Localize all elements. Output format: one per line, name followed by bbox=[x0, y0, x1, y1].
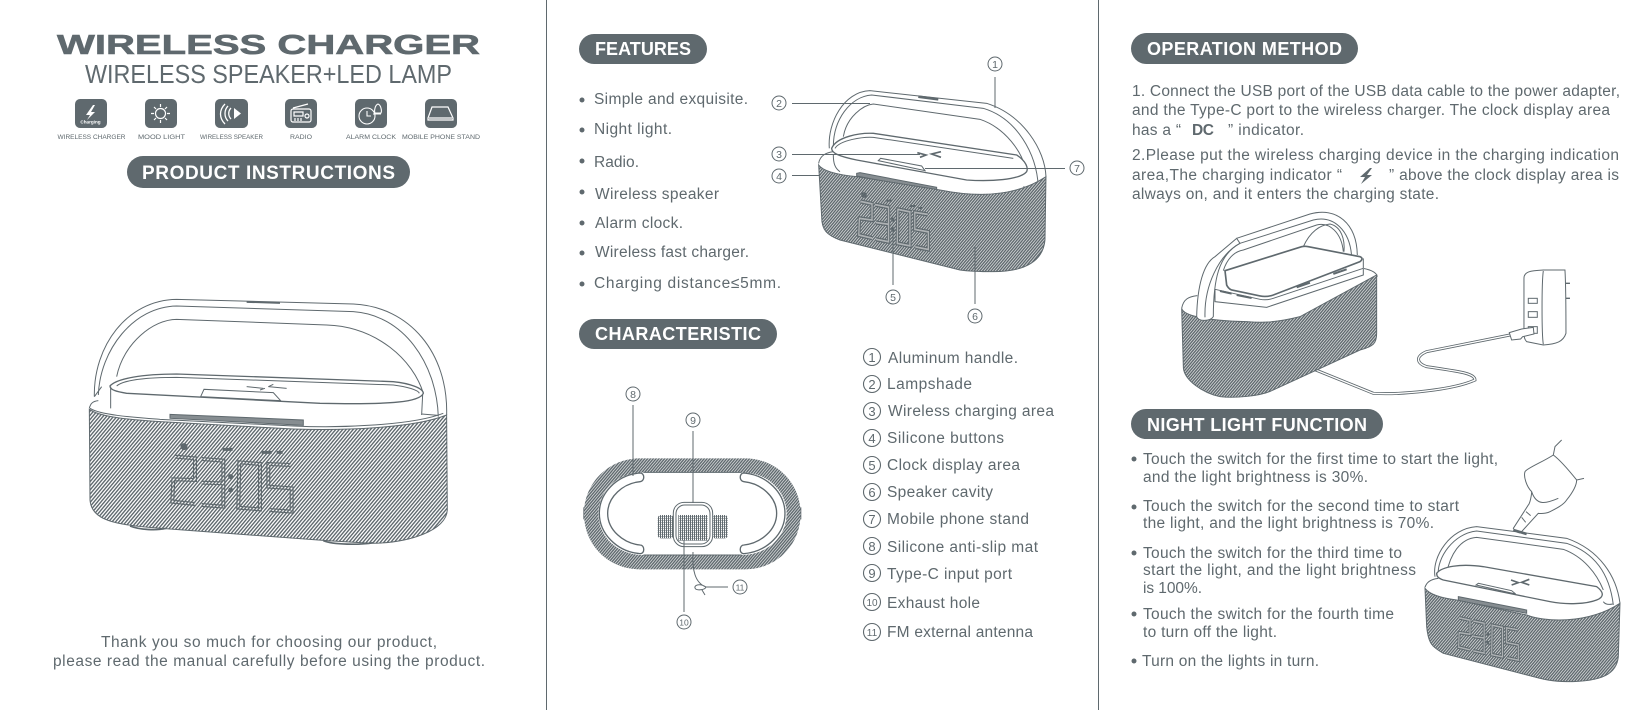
list: features: Radio. bbox=[594, 154, 639, 171]
text: operation steps: ” above the clock display area is bbox=[1389, 167, 1619, 184]
text: operation steps bbox=[1132, 83, 1620, 203]
subtitle: WIRELESS SPEAKER+LED LAMP bbox=[85, 59, 452, 89]
panel: cover bbox=[53, 29, 485, 670]
illustration: labelled product top view bbox=[819, 91, 1046, 272]
list: numbered parts: 1 bbox=[868, 350, 876, 365]
list: numbered parts: 7 bbox=[868, 512, 876, 527]
list: features bbox=[580, 91, 781, 292]
panel: features bbox=[579, 34, 1084, 323]
list: numbered parts: 8 bbox=[868, 539, 876, 554]
text: night light steps: Touch the switch for the second time to start bbox=[1143, 498, 1460, 515]
callouts: product parts 8-11: 8 bbox=[630, 389, 636, 401]
list: numbered parts: 11 bbox=[867, 628, 878, 639]
icon: mood light bbox=[145, 99, 177, 128]
list: features: Wireless fast charger. bbox=[595, 244, 749, 261]
icon labels: WIRELESS CHARGER bbox=[58, 134, 126, 141]
panel divider: left bbox=[546, 0, 547, 710]
text: thank you note: Thank you so much for choosing our product, bbox=[101, 634, 437, 651]
callouts: product parts 1-7: 1 bbox=[992, 59, 998, 71]
list: features: Charging distance≤5mm. bbox=[594, 275, 781, 292]
icon labels: RADIO bbox=[290, 134, 312, 141]
heading: product instructions bbox=[127, 156, 410, 188]
illustration: product front view bbox=[89, 299, 447, 544]
callouts: product parts 8-11: 11 bbox=[736, 582, 745, 592]
list: numbered parts: Clock display area bbox=[887, 457, 1020, 474]
text: operation steps: always on, and it enters the charging state. bbox=[1132, 186, 1439, 203]
panel: operation method bbox=[1131, 33, 1620, 397]
callouts: product parts 1-7: 4 bbox=[776, 171, 782, 183]
text: thank you note: please read the manual carefully before using the product. bbox=[53, 653, 485, 670]
list: features: Alarm clock. bbox=[595, 215, 683, 232]
icon labels bbox=[58, 134, 480, 141]
list: numbered parts: 4 bbox=[868, 431, 876, 446]
callouts: product parts 1-7: 2 bbox=[776, 98, 782, 110]
list: numbered parts: 2 bbox=[868, 377, 876, 392]
callouts: product parts 8-11: 9 bbox=[690, 415, 696, 427]
list: features: Wireless speaker bbox=[595, 186, 719, 203]
text: night light steps: the light, and the light brightness is 70%. bbox=[1143, 515, 1434, 532]
heading: characteristic: CHARACTERISTIC bbox=[595, 324, 761, 344]
callouts: product parts 8-11: 10 bbox=[679, 618, 689, 628]
text: night light steps: Touch the switch for the first time to start the light, bbox=[1143, 451, 1498, 468]
list: numbered parts: 3 bbox=[868, 404, 876, 419]
list: numbered parts: Mobile phone stand bbox=[887, 511, 1029, 528]
heading: characteristic bbox=[579, 319, 777, 349]
illustration: finger touching the switch bbox=[1425, 440, 1620, 682]
icon: wireless charger: Charging bbox=[80, 120, 101, 124]
list: numbered parts: Exhaust hole bbox=[887, 595, 980, 612]
list: numbered parts: 5 bbox=[868, 458, 876, 473]
illustration: charging phone with adapter and cable bbox=[1182, 212, 1570, 397]
list: numbered parts bbox=[864, 348, 1054, 641]
list: numbered parts: Speaker cavity bbox=[887, 484, 993, 501]
list: numbered parts: 10 bbox=[866, 598, 878, 609]
icon: radio bbox=[285, 99, 317, 128]
list: numbered parts: Aluminum handle. bbox=[888, 350, 1018, 367]
text: night light steps: is 100%. bbox=[1143, 580, 1202, 597]
heading: night light function: NIGHT LIGHT FUNCTION bbox=[1147, 415, 1367, 435]
icon: wireless speaker bbox=[215, 99, 248, 128]
text: night light steps bbox=[1132, 451, 1498, 670]
callouts: product parts 1-7: 5 bbox=[890, 292, 896, 304]
text: night light steps: and the light brightness is 30%. bbox=[1143, 469, 1368, 486]
heading: night light function bbox=[1131, 409, 1383, 439]
text: operation steps: DC bbox=[1192, 122, 1214, 139]
list: numbered parts: FM external antenna bbox=[887, 624, 1033, 641]
icon: mobile phone stand bbox=[425, 99, 457, 128]
callouts: product parts 1-7: 7 bbox=[1074, 163, 1080, 175]
callouts: product parts 8-11 bbox=[626, 387, 747, 629]
list: numbered parts: Silicone anti-slip mat bbox=[887, 539, 1039, 556]
text: night light steps: Touch the switch for the third time to bbox=[1143, 545, 1402, 562]
text: operation steps: 1. Connect the USB port of the USB data cable to the power adapter, bbox=[1132, 83, 1620, 100]
heading: operation method bbox=[1131, 33, 1358, 64]
title: WIRELESS CHARGER bbox=[57, 29, 480, 60]
heading: product instructions: PRODUCT INSTRUCTIONS bbox=[142, 163, 395, 184]
icon labels: WIRELESS SPEAKER bbox=[200, 134, 263, 141]
heading: features bbox=[579, 34, 707, 64]
illustration: product bottom view bbox=[583, 458, 801, 569]
text: operation steps: area,The charging indicator “ bbox=[1132, 167, 1342, 184]
icon labels: MOBILE PHONE STAND bbox=[402, 134, 480, 141]
list: numbered parts: Lampshade bbox=[887, 376, 972, 393]
text: thank you note bbox=[53, 634, 485, 670]
callouts: product parts 1-7: 6 bbox=[972, 311, 978, 323]
icon labels: MOOD LIGHT bbox=[138, 134, 185, 141]
panel divider: right bbox=[1098, 0, 1099, 710]
text: operation steps: has a “ bbox=[1132, 122, 1181, 139]
heading: operation method: OPERATION METHOD bbox=[1147, 39, 1342, 59]
callouts: product parts 1-7: 3 bbox=[776, 149, 782, 161]
icon: alarm clock bbox=[355, 99, 387, 128]
text: night light steps: to turn off the light. bbox=[1143, 624, 1277, 641]
text: night light steps: start the light, and the light brightness bbox=[1143, 562, 1416, 579]
text: operation steps: and the Type-C port to the wireless charger. The clock display area bbox=[1132, 102, 1610, 119]
panel: night light function bbox=[1131, 409, 1620, 682]
text: night light steps: Touch the switch for the fourth time bbox=[1143, 606, 1394, 623]
list: numbered parts: Type-C input port bbox=[887, 566, 1013, 583]
text: night light steps: Turn on the lights in turn. bbox=[1142, 653, 1319, 670]
panel: characteristic bbox=[579, 319, 1054, 641]
text: operation steps: 2.Please put the wireless charging device in the charging indication bbox=[1132, 147, 1619, 164]
list: numbered parts: Silicone buttons bbox=[887, 430, 1004, 447]
text: operation steps: ” indicator. bbox=[1228, 122, 1304, 139]
heading: features: FEATURES bbox=[595, 39, 691, 59]
icon: wireless charger bbox=[75, 99, 107, 128]
list: numbered parts: Wireless charging area bbox=[888, 403, 1054, 420]
list: numbered parts: 9 bbox=[868, 566, 876, 581]
list: features: Simple and exquisite. bbox=[594, 91, 748, 108]
list: numbered parts: 6 bbox=[868, 485, 876, 500]
icon labels: ALARM CLOCK bbox=[346, 134, 396, 141]
callouts: product parts 1-7 bbox=[772, 57, 1084, 323]
list: features: Night light. bbox=[594, 121, 672, 138]
